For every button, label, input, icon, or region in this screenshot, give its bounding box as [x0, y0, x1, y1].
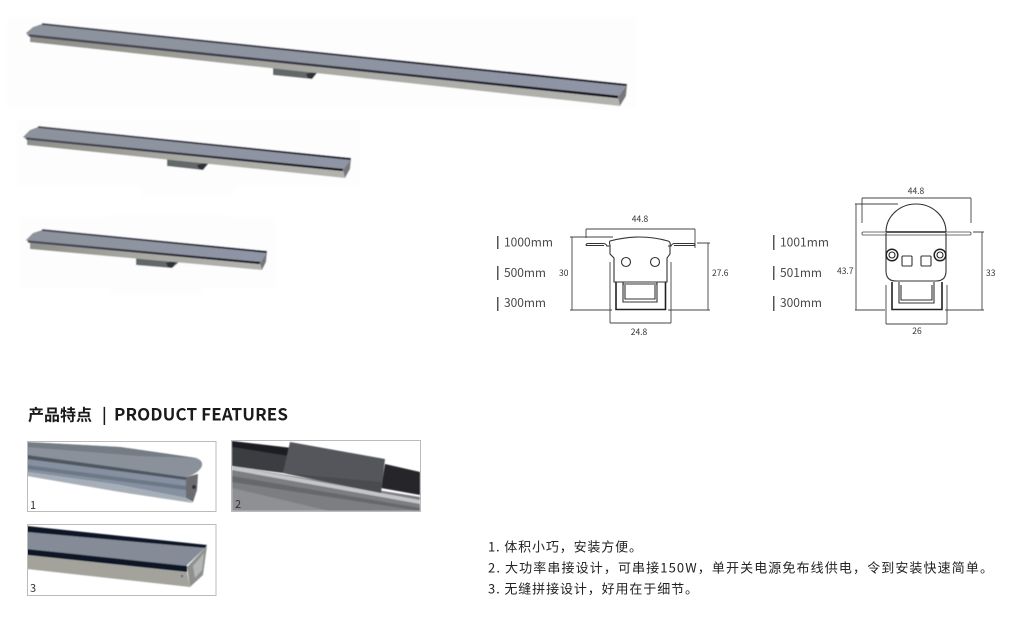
photo 1: profile with lens: [27, 442, 216, 513]
heading: product features: 产品特点: [28, 402, 92, 426]
dimension drawing: domed profile: [837, 185, 996, 337]
photo 3: seamless end: [27, 524, 216, 596]
photo 1: profile with lens: 1: [30, 497, 36, 513]
dimension drawing: flat profile: [559, 213, 729, 338]
product: short light bar 300mm: [20, 215, 275, 294]
dimension drawing: domed profile: 43.7: [837, 265, 854, 277]
dimension drawing: flat profile: 24.8: [631, 326, 648, 338]
length list: first profile: [497, 234, 553, 311]
dimension drawing: flat profile: 27.6: [712, 267, 729, 279]
feature list: 2. 大功率串接设计，可串接150W，单开关电源免布线供电，令到安装快速简单。: [488, 558, 993, 576]
dimension drawing: domed profile: 33: [986, 267, 996, 279]
length list: first profile: 500mm: [504, 264, 546, 281]
heading: product features: PRODUCT FEATURES: [114, 400, 288, 426]
product: long light bar 1000mm: [7, 18, 636, 109]
feature list: 1. 体积小巧，安装方便。: [488, 536, 642, 556]
dimension drawing: flat profile: 44.8: [632, 213, 649, 225]
length list: second profile: [773, 234, 829, 311]
dimension drawing: flat profile: 30: [559, 267, 569, 279]
length list: second profile: 1001mm: [780, 234, 829, 250]
length list: first profile: 300mm: [504, 294, 546, 311]
dimension drawing: domed profile: 44.8: [908, 185, 925, 197]
dimension drawing: domed profile: 26: [912, 325, 922, 337]
feature list: [488, 536, 993, 598]
length list: first profile: 1000mm: [504, 234, 553, 250]
photo 3: seamless end: 3: [30, 580, 36, 596]
photo 2: connector box: [232, 440, 420, 512]
photo 2: connector box: 2: [235, 496, 241, 512]
length list: second profile: 501mm: [780, 264, 822, 281]
product: medium light bar 500mm: [17, 120, 360, 195]
feature list: 3. 无缝拼接设计，好用在于细节。: [488, 578, 698, 598]
length list: second profile: 300mm: [780, 294, 822, 311]
heading: product features: |: [102, 402, 107, 426]
